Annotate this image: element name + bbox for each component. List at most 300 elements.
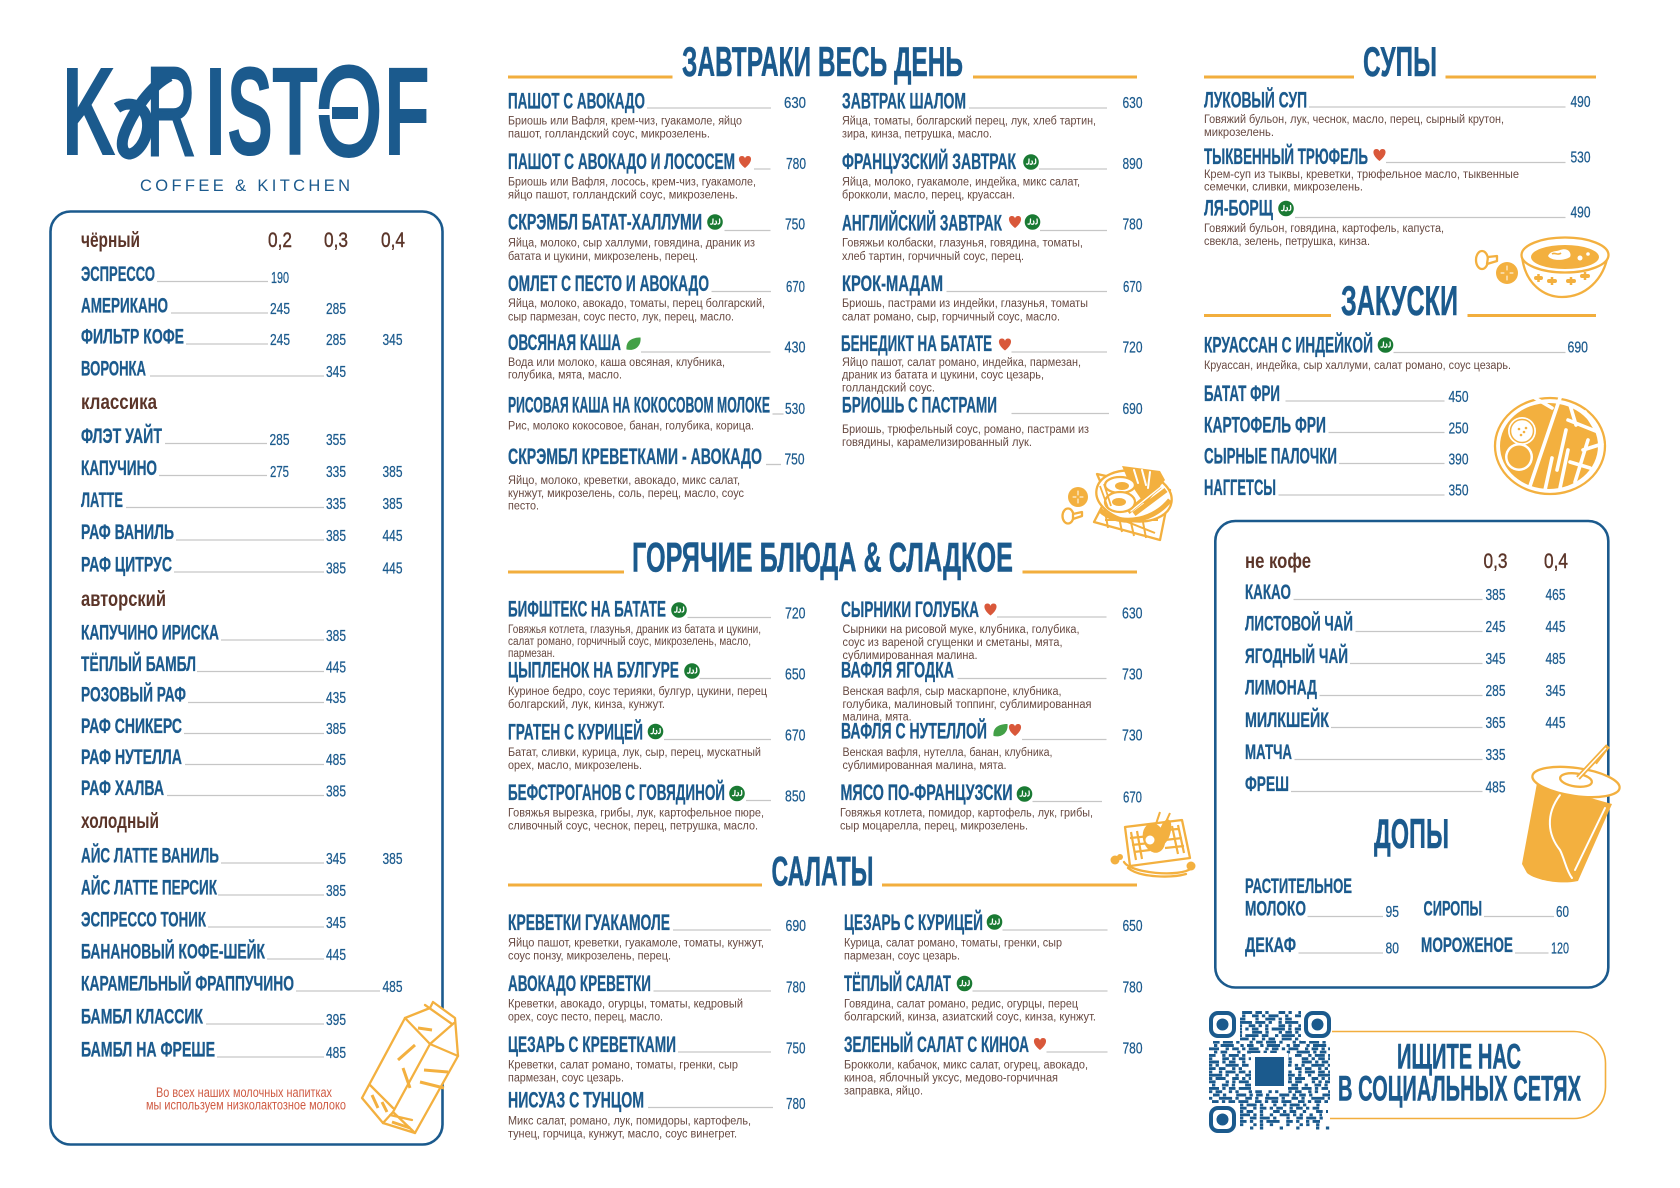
logo: Kristof wordmark: R: [146, 41, 196, 182]
item: Вафля с нутеллой: 730: [1122, 728, 1143, 744]
row: Ягодный чай: 345: [1486, 651, 1506, 668]
item: Бифштекс на батате: 720: [785, 606, 806, 622]
row: Лимонад: ЛИМОНАД: [1245, 676, 1317, 700]
row: Раф нутелла: 485: [326, 752, 346, 769]
item: Французский завтрак: 890: [1122, 156, 1143, 173]
item: Бефстроганов с говядиной: сливочный соус, чеснок, перец, петрушка, масло.: [508, 821, 758, 833]
item: Пашот с авокадо: [508, 88, 806, 141]
item: Тыквенный трюфель: [1204, 144, 1591, 194]
item: Английский завтрак: АНГЛИЙСКИЙ ЗАВТРАК: [842, 210, 1002, 236]
item: Сырники голубка: сублимированная малина.: [842, 650, 978, 662]
item: Луковый суп: 490: [1570, 94, 1591, 111]
item: Пашот с авокадо и лососем: яйцо пашот, голландский соус, микрозелень.: [508, 190, 738, 202]
item: Сырники голубка: Сырники на рисовой муке, клубника, голубика,: [842, 624, 1080, 636]
item: Зеленый салат с киноа: Брокколи, кабачок, микс салат, огурец, авокадо,: [844, 1060, 1088, 1072]
row: Какао: 465: [1546, 587, 1566, 604]
item: Бриошь с пастрами: Бриошь, трюфельный соус, романо, пастрами из: [842, 424, 1089, 436]
item: Цезарь с креветками: 750: [786, 1040, 806, 1058]
row: Какао: 385: [1486, 587, 1506, 604]
header: не кофе with sizes: [1245, 550, 1568, 573]
row: Эспрессо тоник: 345: [326, 915, 346, 932]
heading: Салаты: САЛАТЫ: [772, 848, 874, 894]
item: Цезарь с курицей: 650: [1122, 918, 1143, 935]
item: Наггетсы: [1204, 475, 1469, 500]
item: Бифштекс на батате: БИФШТЕКС НА БАТАТЕ: [508, 596, 666, 622]
icon: heart: [1009, 216, 1021, 228]
item: Цезарь с креветками: [508, 1032, 806, 1085]
row: Лимонад: [1245, 676, 1566, 700]
row: Розовый раф: 435: [326, 690, 346, 707]
item: Гратен с курицей: Батат, сливки, курица, лук, сыр, перец, мускатный: [508, 747, 761, 759]
item: Французский завтрак: Яйца, молоко, гуакамоле, индейка, микс салат,: [842, 177, 1080, 189]
icon: green badge: [1017, 786, 1032, 802]
logo: Kristof wordmark: T: [272, 41, 318, 182]
row: Американо: [81, 294, 346, 318]
row: Капучино ириска: 385: [326, 628, 346, 645]
item: Ля-борщ: ЛЯ-БОРЩ: [1204, 196, 1273, 220]
heading: Горячие блюда & сладкое: ГОРЯЧИЕ БЛЮДА & СЛАДКОЕ: [632, 534, 1013, 580]
row: Фильтр кофе: ФИЛЬТР КОФЕ: [81, 324, 184, 348]
heading: Закуски: ЗАКУСКИ: [1341, 277, 1458, 324]
panel: coffee drinks: [50, 212, 442, 1144]
row: Воронка: [81, 356, 346, 381]
item: Сырники голубка: [841, 597, 1143, 662]
row: Раф халва: 385: [326, 784, 346, 800]
item: Мясо по-французски: 670: [1123, 790, 1142, 806]
row: Раф цитрус: 445: [382, 560, 402, 578]
item: Бенедикт на батате: Яйцо пашот, салат романо, индейка, пармезан,: [842, 357, 1081, 369]
item: Наггетсы: 350: [1448, 482, 1469, 500]
item: Завтрак шалом: зира, кинза, петрушка, масло.: [842, 129, 992, 141]
item: Вафля ягодка: малина, мята.: [842, 712, 912, 724]
item: Скрэмбл креветками - авокадо: песто.: [508, 501, 539, 513]
item: Английский завтрак: [842, 210, 1143, 263]
item: Бриошь с пастрами: [842, 392, 1143, 449]
item: Зеленый салат с киноа: заправка, яйцо.: [844, 1086, 923, 1098]
illustration: breakfast plate: [1062, 465, 1176, 540]
callout: find us on social networks: ИЩИТЕ НАС: [1397, 1038, 1521, 1076]
row: Листовой чай: 245: [1486, 619, 1506, 636]
item: Бенедикт на батате: БЕНЕДИКТ НА БАТАТЕ: [841, 331, 992, 356]
coffee header: чёрный with sizes: чёрный: [81, 229, 140, 252]
item: Овсяная каша: голубика, мята, масло.: [508, 370, 622, 382]
item: Омлет с песто и авокадо: ОМЛЕТ С ПЕСТО И АВОКАДО: [508, 271, 709, 296]
heading: Допы: ДОПЫ: [1374, 810, 1449, 857]
row: Раф сникерс: [81, 714, 346, 738]
item: Цыпленок на булгуре: [508, 658, 806, 711]
row: Милкшейк: [1245, 707, 1566, 732]
item: Зеленый салат с киноа: ЗЕЛЕНЫЙ САЛАТ С КИНОА: [844, 1032, 1029, 1057]
row: Листовой чай: 445: [1546, 619, 1566, 636]
item: Тыквенный трюфель: ТЫКВЕННЫЙ ТРЮФЕЛЬ: [1204, 144, 1368, 169]
item: Овсяная каша: Вода или молоко, каша овсяная, клубника,: [508, 357, 725, 369]
row: Какао: КАКАО: [1245, 580, 1291, 604]
item: Бенедикт на батате: [841, 331, 1143, 395]
item: Пашот с авокадо: Бриошь или Вафля, крем-чиз, гуакамоле, яйцо: [508, 116, 742, 128]
row: Фильтр кофе: [81, 324, 402, 349]
item: Английский завтрак: Говяжьи колбаски, глазунья, говядина, томаты,: [842, 238, 1083, 250]
row: Флэт уайт: ФЛЭТ УАЙТ: [81, 423, 162, 448]
row: Раф цитрус: РАФ ЦИТРУС: [81, 552, 172, 576]
row: Лимонад: 285: [1486, 683, 1506, 700]
row: Фильтр кофе: 345: [382, 332, 402, 349]
extra: декаф: ДЕКАФ: [1245, 933, 1296, 957]
item: Сырники голубка: 630: [1122, 606, 1143, 622]
row: Бамбл классик: 395: [326, 1012, 346, 1029]
item: Креветки гуакамоле: КРЕВЕТКИ ГУАКАМОЛЕ: [508, 910, 670, 935]
item: Ля-борщ: Говяжий бульон, говядина, картофель, капуста,: [1204, 223, 1444, 235]
logo: Kristof wordmark: S: [227, 41, 273, 182]
item: Омлет с песто и авокадо: сыр пармезан, соус песто, лук, перец, масло.: [508, 312, 734, 324]
logo: Kristof wordmark: F: [384, 41, 430, 182]
item: Круассан с индейкой: КРУАССАН С ИНДЕЙКОЙ: [1204, 332, 1373, 358]
extra: декаф: 80: [1386, 940, 1399, 958]
row: Карамельный фраппучино: КАРАМЕЛЬНЫЙ ФРАППУЧИНО: [81, 970, 294, 996]
row: Раф сникерс: 385: [326, 721, 346, 738]
item: Цыпленок на булгуре: 650: [785, 666, 806, 684]
logo: Kristof wordmark: O: [316, 41, 382, 182]
item: Скрэмбл креветками - авокадо: Яйцо, молоко, креветки, авокадо, микс салат,: [508, 475, 740, 487]
item: Круассан с индейкой: 690: [1568, 340, 1588, 356]
illustration: takeaway cup: [1522, 746, 1622, 882]
extra: мороженое: 120: [1551, 940, 1569, 958]
extra: декаф: [1245, 933, 1399, 958]
extra: сиропы: СИРОПЫ: [1424, 896, 1482, 920]
item: Бифштекс на батате: пармезан.: [508, 648, 555, 660]
row: Айс латте ваниль: АЙС ЛАТТЕ ВАНИЛЬ: [81, 842, 219, 868]
row: Латте: ЛАТТЕ: [81, 488, 123, 512]
item: Луковый суп: Говяжий бульон, лук, чеснок, масло, перец, сырный крутон,: [1204, 114, 1504, 126]
item: Цезарь с курицей: ЦЕЗАРЬ С КУРИЦЕЙ: [844, 910, 983, 935]
row: Фреш: [1245, 772, 1506, 796]
item: Бриошь с пастрами: говядины, карамелизированный лук.: [842, 437, 1032, 449]
row: Бамбл классик: БАМБЛ КЛАССИК: [81, 1004, 204, 1028]
icon: leaf: [993, 724, 1008, 736]
item: Батат фри: БАТАТ ФРИ: [1204, 381, 1280, 406]
item: Мясо по-французски: сыр моцарелла, перец, микрозелень.: [840, 821, 1028, 833]
row: Эспрессо: [81, 262, 289, 287]
item: Рисовая каша на кокосовом молоке: Рис, молоко кокосовое, банан, голубика, корица.: [508, 421, 754, 433]
header: не кофе with sizes: 0,3: [1484, 550, 1508, 573]
item: Креветки гуакамоле: соус понзу, микрозелень, перец.: [508, 951, 671, 963]
row: Матча: МАТЧА: [1245, 740, 1292, 764]
logo: Kristof wordmark: K: [62, 41, 116, 182]
row: Фильтр кофе: 285: [326, 332, 346, 349]
item: Сырные палочки: СЫРНЫЕ ПАЛОЧКИ: [1204, 444, 1337, 468]
icon: heart: [999, 338, 1011, 350]
row: Раф цитрус: [81, 552, 402, 578]
coffee header: чёрный with sizes: [81, 229, 405, 252]
item: Луковый суп: [1204, 88, 1591, 139]
item: Бриошь с пастрами: БРИОШЬ С ПАСТРАМИ: [842, 392, 997, 418]
row: Матча: 335: [1486, 747, 1506, 764]
row: Розовый раф: РОЗОВЫЙ РАФ: [81, 682, 186, 706]
item: Вафля ягодка: ВАФЛЯ ЯГОДКА: [841, 658, 954, 682]
item: Зеленый салат с киноа: киноа, яблочный уксус, медово-горчичная: [844, 1073, 1058, 1085]
illustration: soup bowl: [1476, 238, 1608, 297]
item: Скрэмбл креветками - авокадо: кунжут, микрозелень, соль, перец, масло, соус: [508, 488, 744, 500]
icon: green badge: [707, 214, 723, 230]
item: Наггетсы: НАГГЕТСЫ: [1204, 475, 1276, 500]
item: Нисуаз с тунцом: [508, 1088, 806, 1141]
logo subtitle: COFFEE & KITCHEN: [140, 177, 350, 195]
item: Вафля ягодка: 730: [1122, 666, 1143, 684]
item: Мясо по-французски: МЯСО ПО-ФРАНЦУЗСКИ: [840, 780, 1012, 805]
item: Зеленый салат с киноа: 780: [1122, 1040, 1143, 1058]
row: Какао: [1245, 580, 1566, 604]
extra: сиропы: 60: [1556, 904, 1569, 921]
row: Банановый кофе-шейк: БАНАНОВЫЙ КОФЕ-ШЕЙК: [81, 938, 266, 964]
item: Тыквенный трюфель: 530: [1570, 150, 1591, 166]
row: Раф ваниль: [81, 520, 402, 545]
row: Милкшейк: 445: [1546, 715, 1566, 732]
item: Гратен с курицей: ГРАТЕН С КУРИЦЕЙ: [508, 720, 643, 744]
row: Раф халва: [81, 776, 346, 800]
item: Тёплый салат: болгарский, кинза, азиатский соус, кинза, кунжут.: [844, 1012, 1096, 1024]
item: Авокадо креветки: Креветки, авокадо, огурцы, томаты, кедровый: [508, 999, 743, 1011]
coffee header: чёрный with sizes: 0,4: [381, 229, 405, 252]
item: Цыпленок на булгуре: ЦЫПЛЕНОК НА БУЛГУРЕ: [508, 658, 679, 682]
icon: heart: [984, 604, 997, 616]
row: Айс латте ваниль: 385: [382, 851, 402, 868]
row: Воронка: ВОРОНКА: [81, 356, 146, 380]
row: Айс латте персик: 385: [326, 883, 346, 900]
item: Вафля ягодка: Венская вафля, сыр маскарпоне, клубника,: [842, 686, 1062, 698]
row: Раф ваниль: 385: [326, 528, 346, 545]
item: Английский завтрак: 780: [1122, 216, 1143, 234]
row: Айс латте персик: АЙС ЛАТТЕ ПЕРСИК: [81, 874, 218, 900]
item: Тыквенный трюфель: семечки, сливки, микрозелень.: [1204, 182, 1363, 194]
item: Гратен с курицей: 670: [785, 728, 806, 744]
logo: Kristof wordmark: I: [205, 41, 226, 182]
category: классика: классика: [81, 391, 157, 414]
item: Скрэмбл батат-халлуми: СКРЭМБЛ БАТАТ-ХАЛЛУМИ: [508, 210, 702, 234]
item: Цезарь с креветками: Креветки, салат романо, томаты, гренки, сыр: [508, 1060, 738, 1072]
row: Флэт уайт: 355: [326, 432, 346, 449]
item: Авокадо креветки: АВОКАДО КРЕВЕТКИ: [508, 971, 651, 996]
item: Скрэмбл креветками - авокадо: СКРЭМБЛ КРЕВЕТКАМИ - АВОКАДО: [508, 444, 762, 469]
item: Крок-мадам: 670: [1123, 279, 1142, 296]
icon: QR code: [1207, 1009, 1332, 1135]
item: Сырники голубка: соус из вареной сгущенки и сметаны, мята,: [842, 637, 1062, 649]
item: Батат фри: 450: [1448, 389, 1469, 406]
icon: heart: [1009, 724, 1021, 736]
item: Бифштекс на батате: [508, 596, 806, 660]
item: Рисовая каша на кокосовом молоке: [508, 392, 805, 433]
item: Бефстроганов с говядиной: [508, 780, 806, 833]
item: Цыпленок на булгуре: болгарский, лук, кинза, кунжут.: [508, 699, 665, 711]
row: Американо: 245: [270, 301, 290, 318]
row: Латте: 385: [382, 496, 402, 513]
icon: leaf: [626, 338, 641, 350]
item: Цезарь с курицей: пармезан, соус цезарь.: [844, 951, 960, 963]
item: Английский завтрак: хлеб тартин, горчичный соус, перец.: [842, 251, 1024, 263]
icon: milk carton: [362, 1002, 458, 1133]
heading: Завтраки весь день: ЗАВТРАКИ ВЕСЬ ДЕНЬ: [682, 38, 963, 85]
row: Раф ваниль: РАФ ВАНИЛЬ: [81, 520, 174, 544]
item: Завтрак шалом: [842, 88, 1143, 141]
icon: green badge: [957, 976, 972, 991]
item: Овсяная каша: ОВСЯНАЯ КАША: [508, 330, 621, 355]
row: Айс латте ваниль: 345: [326, 851, 346, 868]
note: lactose-free milk: Во всех наших молочных напитках: [156, 1085, 332, 1100]
item: Круассан с индейкой: Круассан, индейка, сыр халлуми, салат романо, соус цезарь.: [1204, 360, 1511, 372]
row: Раф нутелла: [81, 745, 346, 769]
item: Скрэмбл батат-халлуми: батата и цукини, микрозелень, перец.: [508, 251, 698, 263]
item: Вафля с нутеллой: сублимированная малина, мята.: [842, 760, 1006, 772]
row: Раф сникерс: РАФ СНИКЕРС: [81, 714, 182, 738]
item: Цыпленок на булгуре: Куриное бедро, соус терияки, булгур, цукини, перец: [508, 686, 767, 698]
item: Зеленый салат с киноа: [844, 1032, 1143, 1098]
row: Розовый раф: [81, 682, 346, 707]
icon: green badge: [729, 786, 745, 801]
item: Французский завтрак: [842, 149, 1143, 202]
row: Американо: АМЕРИКАНО: [81, 294, 168, 318]
item: Цезарь с курицей: [844, 910, 1143, 963]
item: Тёплый салат: ТЁПЛЫЙ САЛАТ: [844, 971, 951, 996]
callout: find us on social networks: [1330, 1032, 1606, 1118]
item: Гратен с курицей: [508, 720, 806, 772]
extra: растительное молоко: 95: [1386, 904, 1399, 921]
item: Завтрак шалом: ЗАВТРАК ШАЛОМ: [842, 88, 966, 114]
item: Бефстроганов с говядиной: 850: [785, 788, 806, 806]
row: Тёплый бамбл: 445: [326, 660, 346, 676]
item: Авокадо креветки: 780: [786, 980, 806, 996]
row: Раф цитрус: 385: [326, 560, 346, 578]
item: Пашот с авокадо и лососем: ПАШОТ С АВОКАДО И ЛОСОСЕМ: [508, 149, 735, 174]
item: Пашот с авокадо и лососем: 780: [786, 156, 806, 173]
row: Капучино: КАПУЧИНО: [81, 456, 157, 480]
extra: растительное молоко: [1245, 874, 1399, 921]
row: Раф халва: РАФ ХАЛВА: [81, 776, 164, 800]
item: Овсяная каша: [508, 330, 806, 382]
item: Креветки гуакамоле: Яйцо пашот, креветки, гуакамоле, томаты, кунжут,: [508, 938, 764, 950]
item: Луковый суп: микрозелень.: [1204, 127, 1274, 139]
extra: растительное молоко: РАСТИТЕЛЬНОЕ: [1245, 874, 1352, 898]
icon: green badge: [987, 914, 1002, 930]
item: Авокадо креветки: орех, соус песто, перец, масло.: [508, 1012, 663, 1024]
row: Милкшейк: МИЛКШЕЙК: [1245, 707, 1330, 732]
row: Лимонад: 345: [1546, 683, 1566, 700]
item: Пашот с авокадо: пашот, голландский соус, микрозелень.: [508, 129, 710, 141]
item: Вафля ягодка: [841, 658, 1143, 724]
row: Эспрессо тоник: ЭСПРЕССО ТОНИК: [81, 908, 207, 932]
row: Воронка: 345: [326, 364, 346, 381]
icon: green badge: [1023, 154, 1039, 170]
icon: green badge: [1378, 337, 1393, 353]
extra: растительное молоко: МОЛОКО: [1245, 896, 1306, 920]
icon: green badge: [1025, 214, 1040, 230]
item: Нисуаз с тунцом: 780: [786, 1096, 806, 1113]
row: Листовой чай: [1245, 610, 1566, 636]
item: Скрэмбл батат-халлуми: [508, 210, 805, 263]
item: Бифштекс на батате: Говяжья котлета, глазунья, драник из батата и цукини,: [508, 624, 761, 636]
row: Листовой чай: ЛИСТОВОЙ ЧАЙ: [1245, 610, 1353, 636]
item: Бриошь с пастрами: 690: [1122, 401, 1143, 418]
row: Бамбл классик: [81, 1004, 346, 1029]
row: Флэт уайт: 285: [270, 432, 290, 449]
icon: green badge: [648, 724, 663, 739]
item: Сырники голубка: СЫРНИКИ ГОЛУБКА: [841, 597, 979, 622]
row: Бамбл на фреше: БАМБЛ НА ФРЕШЕ: [81, 1038, 215, 1062]
item: Пашот с авокадо: 630: [784, 95, 806, 112]
item: Бенедикт на батате: голландский соус.: [842, 383, 935, 395]
item: Скрэмбл батат-халлуми: Яйца, молоко, сыр халлуми, говядина, драник из: [508, 238, 755, 250]
item: Ля-борщ: 490: [1570, 204, 1591, 222]
icon: green badge: [671, 602, 687, 618]
item: Нисуаз с тунцом: Микс салат, романо, лук, помидоры, картофель,: [508, 1116, 751, 1128]
illustration: plate of fries: [1495, 392, 1605, 494]
item: Картофель фри: 250: [1448, 420, 1469, 438]
item: Ля-борщ: свекла, зелень, петрушка, кинза.: [1204, 236, 1370, 248]
icon: heart: [1373, 149, 1386, 161]
row: Милкшейк: 365: [1486, 715, 1506, 732]
item: Креветки гуакамоле: [508, 910, 806, 963]
illustration: waffle: [1110, 812, 1196, 876]
row: Эспрессо: ЭСПРЕССО: [81, 262, 155, 286]
row: Фреш: 485: [1486, 780, 1506, 796]
row: Флэт уайт: [81, 423, 346, 449]
item: Бенедикт на батате: 720: [1122, 340, 1143, 356]
row: Раф ваниль: 445: [382, 528, 402, 545]
item: Омлет с песто и авокадо: Яйца, молоко, авокадо, томаты, перец болгарский,: [508, 298, 765, 310]
item: Вафля с нутеллой: ВАФЛЯ С НУТЕЛЛОЙ: [841, 718, 987, 744]
item: Нисуаз с тунцом: тунец, горчица, кунжут, масло, соус винегрет.: [508, 1129, 737, 1141]
item: Рисовая каша на кокосовом молоке: 530: [785, 401, 805, 418]
coffee header: чёрный with sizes: 0,3: [324, 229, 348, 252]
heading: Супы: СУПЫ: [1363, 38, 1437, 85]
item: Мясо по-французски: Говяжья котлета, помидор, картофель, лук, грибы,: [840, 808, 1093, 820]
row: Бамбл на фреше: 485: [326, 1045, 346, 1062]
item: Крок-мадам: КРОК-МАДАМ: [842, 271, 943, 296]
item: Омлет с песто и авокадо: 670: [786, 279, 805, 296]
item: Бифштекс на батате: салат романо, горчичный соус, микрозелень, масло,: [508, 636, 751, 648]
row: Капучино: [81, 456, 402, 481]
item: Скрэмбл батат-халлуми: 750: [785, 216, 805, 234]
item: Вафля с нутеллой: [841, 718, 1143, 772]
icon: heart: [1034, 1038, 1046, 1050]
item: Скрэмбл креветками - авокадо: [508, 444, 805, 513]
coffee header: чёрный with sizes: 0,2: [268, 229, 292, 252]
item: Цезарь с курицей: Курица, салат романо, томаты, гренки, сыр: [844, 938, 1062, 950]
note: lactose-free milk: [146, 1085, 346, 1112]
row: Латте: 335: [326, 496, 346, 513]
row: Капучино: 335: [326, 464, 346, 481]
panel: not coffee and extras: [1215, 521, 1608, 988]
item: Вафля с нутеллой: Венская вафля, нутелла, банан, клубника,: [842, 747, 1052, 759]
item: Цезарь с креветками: пармезан, соус цезарь.: [508, 1073, 624, 1085]
note: lactose-free milk: мы используем низколактозное молоко: [146, 1098, 346, 1112]
icon: green badge: [1278, 201, 1294, 216]
item: Бенедикт на батате: драник из батата и цукини, соус цезарь,: [842, 370, 1044, 382]
row: Карамельный фраппучино: 485: [382, 979, 402, 996]
row: Ягодный чай: 485: [1546, 651, 1566, 668]
item: Бефстроганов с говядиной: БЕФСТРОГАНОВ С ГОВЯДИНОЙ: [508, 780, 725, 805]
item: Сырные палочки: 390: [1448, 452, 1469, 468]
row: Ягодный чай: ЯГОДНЫЙ ЧАЙ: [1245, 643, 1348, 668]
icon: green badge: [684, 663, 700, 679]
item: Французский завтрак: ФРАНЦУЗСКИЙ ЗАВТРАК: [842, 149, 1016, 174]
row: Тёплый бамбл: ТЁПЛЫЙ БАМБЛ: [81, 651, 196, 676]
item: Пашот с авокадо: ПАШОТ С АВОКАДО: [508, 88, 645, 114]
item: Завтрак шалом: Яйца, томаты, болгарский перец, лук, хлеб тартин,: [842, 116, 1096, 128]
item: Скрэмбл креветками - авокадо: 750: [784, 452, 805, 468]
category: авторский: авторский: [81, 588, 166, 611]
item: Бефстроганов с говядиной: Говяжья вырезка, грибы, лук, картофельное пюре,: [508, 808, 764, 820]
item: Пашот с авокадо и лососем: [508, 149, 806, 202]
item: Гратен с курицей: орех, масло, микрозелень.: [508, 760, 642, 772]
item: Омлет с песто и авокадо: [508, 271, 805, 324]
